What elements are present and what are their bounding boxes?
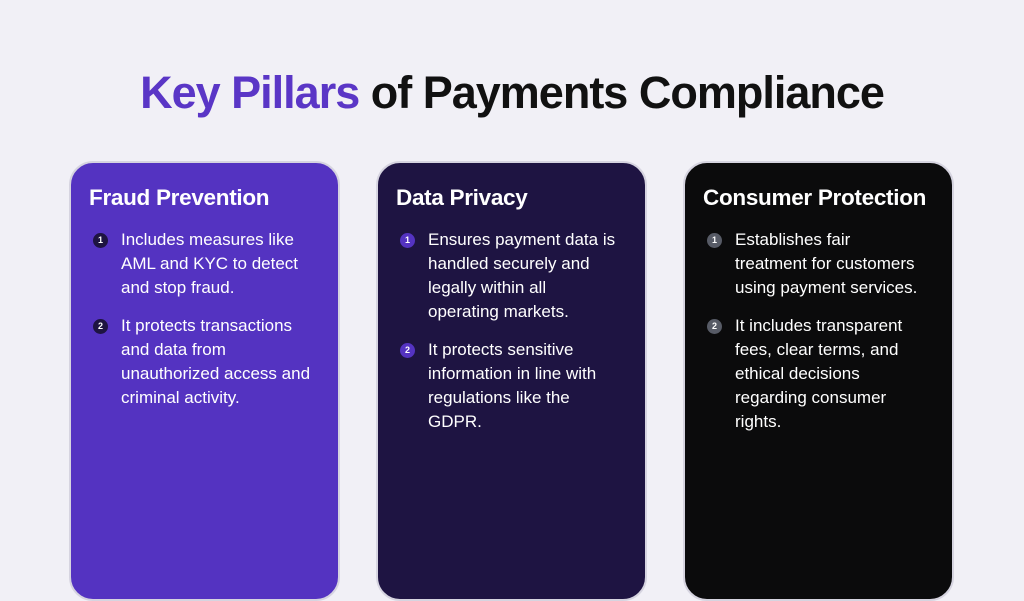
panel: fraud prevention — [69, 161, 340, 601]
list: Establishes fair treatment for customers using payment services. — [735, 230, 917, 297]
list: 2 — [98, 321, 103, 331]
list: 1 — [712, 235, 717, 245]
list — [707, 230, 917, 431]
heading: Consumer Protection — [703, 185, 926, 210]
panel: consumer protection — [683, 161, 954, 601]
list: Ensures payment data is handled securely and legally within all operating markets. — [428, 230, 615, 321]
list: 1 — [98, 235, 103, 245]
list: It protects sensitive information in line with regulations like the GDPR. — [428, 340, 596, 431]
heading: Fraud Prevention — [89, 185, 269, 210]
list: Includes measures like AML and KYC to detect and stop fraud. — [121, 230, 298, 297]
list — [400, 230, 615, 431]
list — [93, 230, 310, 407]
list: 2 — [405, 345, 410, 355]
list: It protects transactions and data from unauthorized access and criminal activity. — [121, 316, 310, 407]
heading: Data Privacy — [396, 185, 528, 210]
title: Key Pillars of Payments Compliance — [140, 67, 884, 118]
list: It includes transparent fees, clear terms, and ethical decisions regarding consumer rights. — [735, 316, 902, 431]
panel: data privacy — [376, 161, 647, 601]
list: 1 — [405, 235, 410, 245]
list: 2 — [712, 321, 717, 331]
